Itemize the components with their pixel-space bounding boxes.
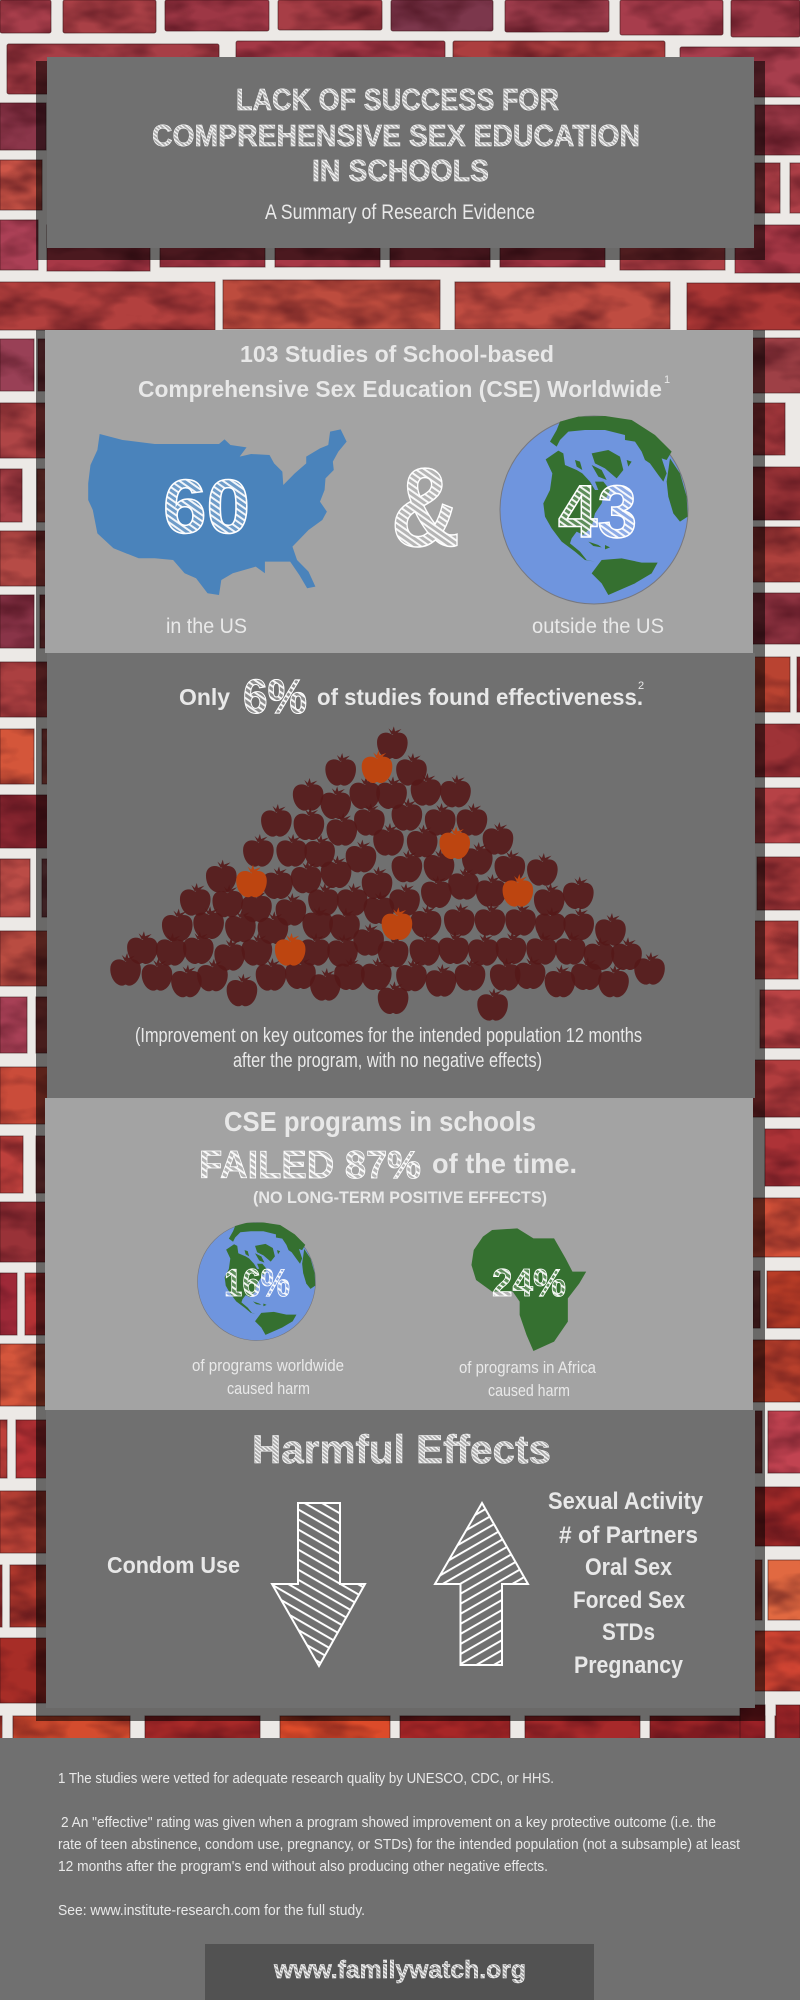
note: improvement definition bbox=[135, 1025, 642, 1072]
footnote 2: 2 An "effective" rating was given when a program showed improvement on a key protective outcome (i.e. the bbox=[61, 1814, 716, 1831]
heading: CSE programs failed: FAILED 87% bbox=[199, 1144, 421, 1187]
heading: 103 studies: 1 bbox=[664, 374, 670, 386]
title bbox=[152, 82, 640, 188]
heading: only 6% bbox=[179, 671, 644, 724]
title: LACK OF SUCCESS FOR bbox=[236, 82, 559, 117]
caption: Africa harm: caused harm bbox=[488, 1381, 570, 1400]
panel: 6 percent effectiveness bbox=[47, 653, 755, 1098]
drop shadow: title panel bbox=[36, 61, 765, 260]
list: increased outcomes bbox=[548, 1488, 704, 1679]
arrow: down bbox=[272, 1503, 365, 1666]
caption: Africa harm: of programs in Africa bbox=[459, 1358, 596, 1377]
footnote 2: rate of teen abstinence, condom use, pregnancy, or STDs) for the intended population (not a subsample) at least bbox=[58, 1836, 741, 1853]
heading: only 6%: of studies found effectiveness. bbox=[317, 684, 643, 710]
icon: small globe bbox=[197, 1222, 316, 1341]
icon: US map bbox=[88, 429, 347, 595]
chart: apple pyramid bbox=[110, 726, 665, 1021]
website banner: www.familywatch.org bbox=[273, 1956, 526, 1984]
caption: worldwide harm: caused harm bbox=[227, 1379, 310, 1398]
list: increased outcomes: # of Partners bbox=[559, 1522, 698, 1549]
source note: See: www.institute-research.com for the full study. bbox=[58, 1902, 365, 1919]
heading: only 6%: Only bbox=[179, 684, 230, 710]
title: IN SCHOOLS bbox=[312, 153, 489, 188]
number: 60: 60 bbox=[163, 465, 250, 550]
panel: 103 studies bbox=[45, 330, 753, 653]
heading: harmful effects: Harmful Effects bbox=[252, 1428, 551, 1472]
drop shadow: content panels bbox=[36, 330, 765, 1721]
panel: harmful effects bbox=[46, 1410, 755, 1708]
number: 43: 43 bbox=[558, 470, 637, 553]
footnote 2 bbox=[58, 1814, 741, 1875]
heading: CSE programs failed bbox=[199, 1106, 577, 1207]
heading: 103 studies: 103 Studies of School-based bbox=[240, 341, 554, 367]
website banner bbox=[205, 1944, 594, 2000]
heading: CSE programs failed: of the time. bbox=[432, 1148, 577, 1179]
panel: footnotes bbox=[0, 1738, 800, 2000]
caption: worldwide harm bbox=[192, 1356, 344, 1398]
heading: only 6%: 6% bbox=[243, 671, 307, 724]
caption: Africa harm bbox=[459, 1358, 596, 1400]
heading: only 6%: 2 bbox=[638, 680, 644, 692]
panel: title bbox=[47, 57, 754, 248]
list: increased outcomes: Oral Sex bbox=[585, 1554, 673, 1581]
icon: globe bbox=[500, 416, 688, 604]
note: improvement definition: after the program, with no negative effects) bbox=[233, 1050, 542, 1072]
heading: 103 studies: Comprehensive Sex Education (CSE) Worldwide bbox=[138, 376, 662, 402]
panel: CSE programs failed bbox=[45, 1098, 753, 1410]
list: increased outcomes: Sexual Activity bbox=[548, 1488, 704, 1515]
list: increased outcomes: STDs bbox=[602, 1619, 655, 1646]
ampersand: & bbox=[391, 445, 460, 570]
title: COMPREHENSIVE SEX EDUCATION bbox=[152, 118, 640, 153]
heading: CSE programs failed: CSE programs in schools bbox=[224, 1106, 536, 1137]
label: outside the US: outside the US bbox=[532, 615, 664, 638]
heading: 103 studies bbox=[138, 341, 670, 402]
icon: Africa map bbox=[471, 1228, 586, 1351]
arrow: up bbox=[435, 1503, 528, 1665]
footnote 2: 12 months after the program's end without also producing other negative effects. bbox=[58, 1858, 548, 1875]
list: increased outcomes: Pregnancy bbox=[574, 1652, 684, 1679]
note: improvement definition: (Improvement on key outcomes for the intended population 12 months bbox=[135, 1025, 642, 1047]
subtitle: A Summary of Research Evidence bbox=[265, 201, 535, 224]
heading: CSE programs failed: (NO LONG-TERM POSITIVE EFFECTS) bbox=[253, 1188, 547, 1207]
label: condom use: Condom Use bbox=[107, 1552, 240, 1578]
number: 24 percent: 24% bbox=[492, 1262, 566, 1305]
list: increased outcomes: Forced Sex bbox=[573, 1587, 686, 1614]
number: 16 percent: 16% bbox=[224, 1262, 290, 1305]
label: in the US: in the US bbox=[166, 615, 247, 638]
caption: worldwide harm: of programs worldwide bbox=[192, 1356, 344, 1375]
footnote 1: 1 The studies were vetted for adequate research quality by UNESCO, CDC, or HHS. bbox=[58, 1770, 554, 1787]
